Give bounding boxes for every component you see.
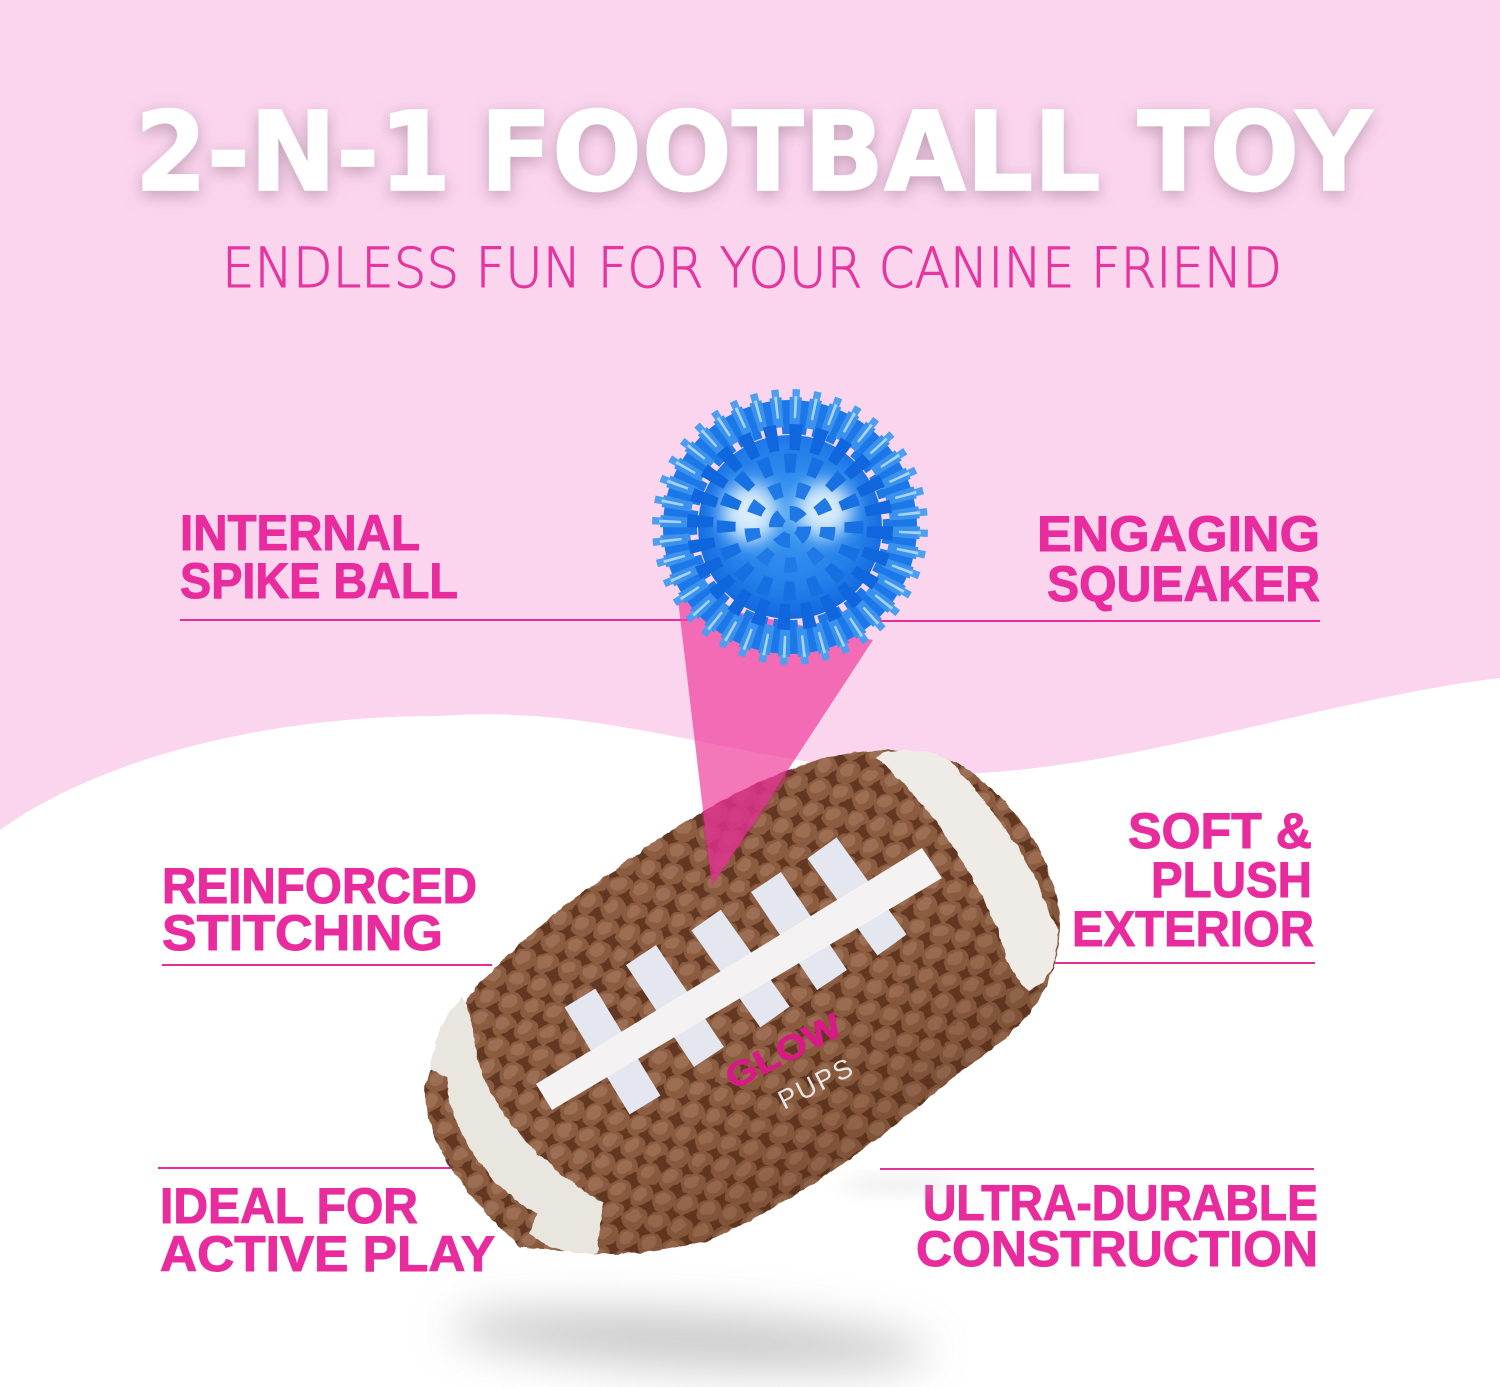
- label: soft and plush exterior: PLUSH: [1151, 852, 1312, 908]
- label: internal spike ball: INTERNAL: [180, 505, 420, 561]
- label: ultra-durable construction: [880, 1168, 1318, 1277]
- spike ball: [657, 394, 923, 660]
- outer spike tips: [657, 394, 923, 660]
- outer spike shafts: [675, 412, 905, 642]
- label: engaging squeaker: ENGAGING: [1037, 506, 1320, 562]
- inner glow left: [722, 483, 778, 543]
- label: ideal for active play: ACTIVE PLAY: [160, 1226, 495, 1282]
- embroidered GLOW logo: GLOW: [719, 1006, 849, 1097]
- body shading: [425, 750, 1060, 1254]
- label: engaging squeaker: [880, 506, 1320, 622]
- football body: [425, 750, 1060, 1254]
- inner spikes: [752, 489, 828, 565]
- subtitle: ENDLESS FUN FOR YOUR CANINE FRIEND: [222, 236, 1282, 300]
- title: FOOTBALL TOY: [480, 88, 1373, 216]
- central spikes: [776, 513, 804, 541]
- label: engaging squeaker: SQUEAKER: [1047, 556, 1320, 612]
- left white end band: [430, 997, 603, 1253]
- label: internal spike ball: SPIKE BALL: [180, 553, 458, 609]
- title: 2-N-1: [135, 88, 451, 216]
- label: ultra-durable construction: ULTRA-DURABLE: [923, 1175, 1318, 1231]
- ring of dark spikes: [700, 437, 880, 617]
- staggered back spikes: [680, 417, 900, 637]
- label: reinforced stitching: STITCHING: [162, 905, 443, 961]
- cross stitches: [580, 848, 892, 1105]
- label: ultra-durable construction: CONSTRUCTION: [916, 1221, 1318, 1277]
- white wave panel: [0, 678, 1500, 1387]
- ground shadow: [449, 1175, 960, 1381]
- label: internal spike ball: [180, 505, 690, 621]
- label: soft and plush exterior: SOFT &: [1128, 803, 1312, 859]
- inner glow right: [796, 482, 852, 538]
- label: ideal for active play: [158, 1167, 495, 1282]
- label: soft and plush exterior: EXTERIOR: [1072, 901, 1314, 957]
- ball core: [698, 435, 882, 619]
- embroidered PUPS logo: PUPS: [773, 1052, 859, 1115]
- football toy: [425, 750, 1060, 1254]
- label: reinforced stitching: [162, 858, 492, 966]
- middle spikes: [726, 463, 854, 591]
- label: reinforced stitching: REINFORCED: [162, 858, 477, 914]
- label: ideal for active play: IDEAL FOR: [160, 1178, 418, 1234]
- label: soft and plush exterior: [1050, 803, 1315, 964]
- pink beam: [678, 600, 873, 886]
- right white end band: [876, 750, 1058, 990]
- main lace: [536, 848, 942, 1110]
- spike highlights: [670, 407, 910, 647]
